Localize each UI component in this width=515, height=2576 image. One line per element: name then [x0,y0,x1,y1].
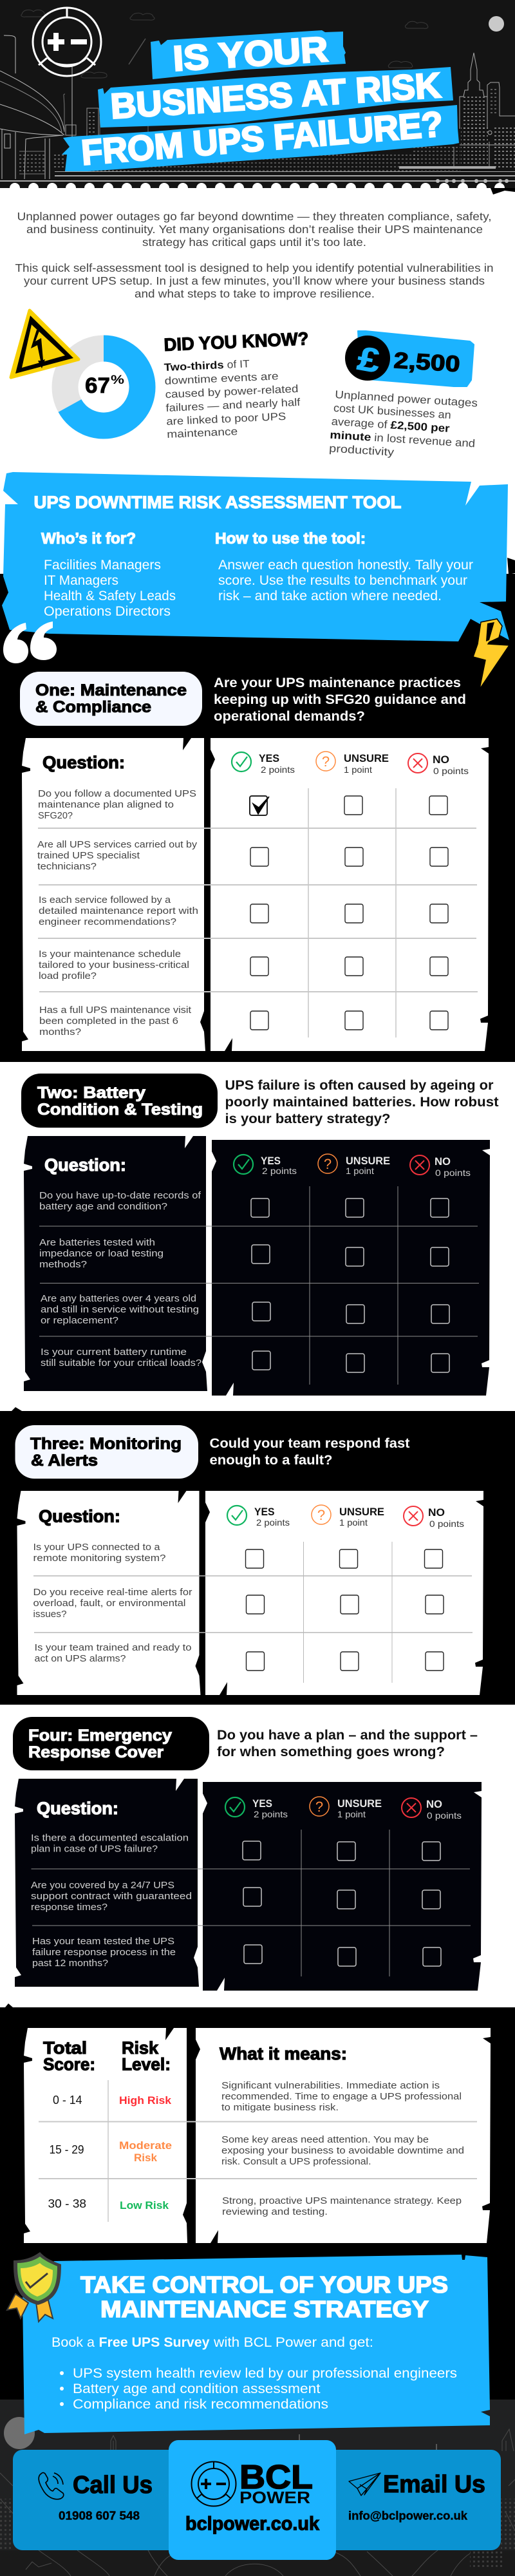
stat text: average of [331,415,388,431]
section four: question panel [15,1779,199,1987]
panel: email us: info@bclpower.co.uk [348,2509,468,2522]
icon: unsure: ? [315,1799,323,1815]
section three: answer panel: NO [428,1506,445,1519]
panel: score and risk level: High Risk [119,2094,172,2107]
section four: checkboxes [243,1841,441,1966]
section one: lead question: Are your UPS maintenance practices [214,675,461,690]
panel: score and risk level: Moderate [119,2139,172,2152]
title: three rotated blue banners: BUSINESS AT RISK [109,65,442,126]
intro text: your current UPS setup. In just a few minutes, you’ll know where your business stands [24,274,485,287]
section two: question panel: Are any batteries over 4 years old [41,1294,196,1304]
panel: call to action: with BCL Power and get: [213,2334,373,2350]
icon: unsure [316,752,335,771]
section four: answer panel: NO [426,1798,442,1810]
section three: answer panel: YES [254,1506,274,1518]
donut chart: 67%: % [111,374,124,387]
did you know text: failures — and nearly half [165,397,301,414]
section one: question panel: SFG20? [38,811,73,821]
panel: call to action: Book a [52,2334,95,2350]
section two: lead question [225,1077,498,1126]
section two: grid lines [39,1186,479,1385]
panel: risk assessment tool: Answer each question honestly. Tally your [218,558,473,573]
stat text [329,388,478,463]
section four: answer panel: 1 point [337,1809,366,1819]
section three: question panel: act on UPS alarms? [35,1654,126,1664]
section one: question panel: Are all UPS services carried out by [37,840,198,850]
icon: yes [232,752,251,772]
section four: question panel: plan in case of UPS failure? [31,1844,158,1855]
section three: lead question [210,1435,409,1468]
section one: heading pill [20,672,202,726]
section two: question panel: battery age and condition? [39,1202,167,1212]
section three: heading pill: & Alerts [31,1452,98,1470]
section one: lead question [214,675,466,724]
stat badge: £2,500: 2,500 [393,348,461,377]
section one: answer panel: 2 points [261,764,295,775]
icon: no [404,1506,423,1526]
panel: risk assessment tool: IT Managers [44,573,118,588]
section two: lead question: UPS failure is often caused by ageing or [225,1077,494,1093]
title: three rotated blue banners: IS YOUR [172,29,329,79]
road bands [0,166,515,182]
section one: grid lines [38,788,478,1037]
section one: question panel: Question: [42,753,125,772]
section four: heading pill: Four: Emergency [28,1727,172,1745]
panel: risk assessment tool: risk – and take action where needed. [218,589,442,603]
section two: lead question: poorly maintained batteries. How robust [225,1094,498,1110]
section three: question panel: Question: [39,1507,120,1526]
stat badge: £2,500 [345,331,474,386]
panel: score and risk level: 0 - 14 [53,2094,82,2107]
section three: answer panel: 0 points [429,1519,464,1529]
icon: lightning bolt [473,619,509,689]
section one: question panel: Is your maintenance schedule [39,949,181,960]
score table grid lines [39,2080,477,2222]
section one: answer panel: YES [259,752,279,764]
panel: what it means: What it means: [220,2044,347,2063]
panel: what it means: to mitigate business risk. [221,2103,339,2113]
did you know text: are linked to poor UPS [166,411,286,428]
intro text: and business continuity. Yet many organisations don’t realise their UPS maintenance [26,223,483,236]
icon: unsure [318,1154,337,1173]
section one: checkboxes [250,796,448,1030]
panel: call us: Call Us [73,2472,153,2499]
panel: score and risk level: Level: [122,2054,171,2074]
panel: risk assessment tool: UPS DOWNTIME RISK ASSESSMENT TOOL [33,493,402,512]
icon: yes [225,1797,245,1817]
stat text: cost UK businesses an [333,402,451,421]
intro text: Unplanned power outages go far beyond downtime — they threaten compliance, safety, [17,210,491,223]
panel: call to action [23,2255,490,2434]
icon: unsure: ? [324,1156,332,1172]
section two: question panel: and still in service without testing [41,1305,199,1315]
section three: question panel: issues? [33,1609,67,1620]
panel: BCL power logo block: BCL [239,2459,313,2496]
section four: question panel: support contract with guaranteed [31,1891,192,1902]
icon: shield badge [7,2252,61,2322]
section three: answer panel: 2 points [256,1517,290,1528]
section four: question panel: failure response process in the [32,1947,176,1958]
intro text [15,210,493,300]
panel: BCL power logo block: bclpower.co.uk [185,2513,319,2535]
panel: call to action: Battery age and condition assessment [73,2381,321,2396]
section four: answer panel: 0 points [427,1810,462,1821]
header: night city scene [0,0,515,193]
bridge and street furniture [0,35,148,179]
logo: BCL roundel [33,8,101,76]
footer background: dark city [0,2400,515,2576]
panel: risk assessment tool: Facilities Managers [44,558,161,573]
panel: call us: 01908 607 548 [59,2509,140,2522]
section two: answer panel [212,1140,490,1396]
section one: question panel: load profile? [39,971,97,981]
panel: risk assessment tool: score. Use the results to benchmark your [218,573,467,588]
section four: answer panel: 2 points [254,1809,288,1819]
section three: heading pill: Three: Monitoring [30,1435,182,1453]
moon [489,16,504,32]
section four: question panel: Are you covered by a 24/7 UPS [31,1880,174,1891]
panel: call us [39,2472,153,2522]
intro text: strategy has critical gaps until it’s too late. [142,236,366,249]
stat text: £2,500 per [390,419,450,435]
icon: quotation mark [3,621,57,663]
section one: answer panel: UNSURE [344,752,389,764]
shooting star [129,39,145,64]
panel: score and risk level: 30 - 38 [48,2197,86,2210]
icon: unsure [310,1797,329,1816]
icon: high voltage warning triangle [11,310,79,377]
section four: question panel: Is there a documented escalation [31,1833,189,1843]
tick mark [253,797,269,814]
did you know heading: DID YOU KNOW? [164,328,309,355]
panel: email us: Email Us [383,2471,485,2498]
section four: answer panel: UNSURE [337,1797,382,1810]
section one: heading pill: & Compliance [35,698,151,716]
section one: answer panel [211,738,489,1051]
section two: answer panel: UNSURE [346,1155,390,1167]
section one: question panel: maintenance plan aligned to [38,800,174,810]
section one: question panel: months? [39,1027,81,1037]
logo: BCL roundel [192,2461,236,2506]
section two: question panel: Are batteries tested with [39,1238,155,1248]
section one: question panel [22,738,205,1051]
section three: lead question: enough to a fault? [210,1452,332,1468]
section one: question panel: engineer recommendations? [39,917,176,927]
section two: heading pill: Condition & Testing [37,1101,203,1119]
panel: contact bar [13,2450,501,2550]
section three: answer panel: UNSURE [339,1506,384,1518]
right towers [454,53,515,169]
panel: what it means: exposing your business to avoidable downtime and [221,2146,464,2156]
section one: answer panel: 0 points [433,766,469,776]
panel: call to action: MAINTENANCE STRATEGY [100,2296,429,2322]
did you know text: caused by power-related [165,383,299,401]
icon: unsure: ? [322,753,330,770]
section four: answer panel: YES [252,1797,272,1810]
title: three rotated blue banners: FROM UPS FAILURE? [80,104,444,173]
panel: score and risk level: Score: [43,2054,95,2074]
panel: call to action: Compliance and risk recommendations [73,2396,328,2412]
section three: heading pill [15,1425,198,1479]
section two: question panel [24,1136,207,1391]
section four: grid lines [31,1830,471,1976]
section three: question panel: remote monitoring system? [33,1553,166,1564]
section two: answer panel: NO [435,1155,451,1168]
panel: risk assessment tool: Health & Safety Leads [44,589,176,603]
section four: answer panel [203,1782,482,1991]
stat text: Unplanned power outages [335,388,478,410]
icon: no [402,1798,421,1817]
panel: score and risk level: Total [43,2038,87,2058]
panel: risk assessment tool: How to use the tool: [215,530,366,547]
scalloped bottom edge [10,183,505,193]
panel: what it means: Significant vulnerabilities. Immediate action is [221,2081,440,2091]
panel: BCL power logo block: POWER [239,2488,310,2507]
stat text: minute [330,429,371,444]
section two: question panel: impedance or load testing [39,1249,164,1259]
section two: question panel: still suitable for your critical loads? [41,1358,201,1368]
section one: lead question: keeping up with SFG20 guidance and [214,692,466,707]
panel: what it means [196,2028,491,2243]
section one: answer panel: 1 point [344,764,372,775]
section three: checkboxes [246,1549,444,1671]
section two: answer panel: 0 points [435,1168,471,1178]
panel: score and risk level: Risk [122,2038,159,2058]
section two: question panel: methods? [39,1260,87,1270]
panel: what it means: reviewing and testing. [222,2207,328,2217]
section four: heading pill [13,1717,209,1770]
section one: question panel: Do you follow a documented UPS [38,789,196,799]
section two: question panel: or replacement? [41,1316,118,1326]
panel: email us [348,2471,485,2522]
section three: lead question: Could your team respond fast [210,1435,409,1451]
section four: lead question: for when something goes wrong? [217,1744,445,1759]
panel: BCL power logo block [169,2440,336,2560]
section two: checkboxes [251,1198,449,1372]
section one: question panel: Has a full UPS maintenance visit [39,1005,191,1016]
section four: question panel: Question: [37,1799,118,1818]
section two: question panel: Question: [44,1155,126,1175]
clouds and stars [21,10,428,78]
section two: lead question: is your battery strategy? [225,1111,390,1126]
section one: lead question: operational demands? [214,708,365,724]
panel: call to action: TAKE CONTROL OF YOUR UPS [80,2271,448,2298]
stat badge: £2,500: £ [355,340,383,381]
section three: question panel: Is your team trained and ready to [35,1643,192,1653]
stat text: in lost revenue and [374,431,476,450]
section three: answer panel: 1 point [339,1517,368,1528]
icon: no [408,753,427,773]
panel: what it means: recommended. Time to engage a UPS professional [221,2092,462,2102]
section two: heading pill: Two: Battery [37,1084,145,1102]
icon: paper plane [349,2473,380,2496]
section four: question panel: Has your team tested the UPS [32,1937,174,1947]
section two: heading pill [21,1074,218,1128]
section one: question panel: Is each service followed by a [39,895,171,905]
section two: answer panel: YES [261,1155,281,1167]
did you know text: downtime events are [164,370,279,387]
section four: question panel: past 12 months? [32,1958,108,1969]
section one: heading pill: One: Maintenance [35,681,187,699]
section one: question panel: tailored to your business-critical [39,960,189,971]
panel: score and risk level [24,2028,187,2243]
icon: unsure [312,1505,331,1524]
section one: question panel: technicians? [37,862,97,872]
panel: call to action: Free UPS Survey [99,2334,210,2350]
section two: answer panel: 2 points [262,1166,297,1176]
did you know text: of IT [227,358,250,371]
intro text: This quick self-assessment tool is designed to help you identify potential vulnerabilities in [15,261,493,274]
section four: question panel: response times? [31,1902,108,1913]
panel: call to action: UPS system health review led by our professional engineers [73,2365,457,2381]
section two: question panel: Is your current battery runtime [41,1347,187,1358]
section three: question panel [17,1491,201,1695]
did you know text [164,356,302,440]
panel: score and risk level: 15 - 29 [49,2143,84,2156]
section one: question panel: been completed in the past 6 [39,1016,178,1027]
section one: question panel: detailed maintenance report with [39,906,198,916]
donut chart: 67%: 67 [85,374,110,398]
intro text: and what steps to take to improve resilience. [135,287,375,300]
panel: score and risk level: Risk [134,2152,158,2164]
section one: answer panel: NO [433,753,449,766]
section three: grid lines [33,1542,473,1683]
icon: unsure: ? [317,1507,325,1523]
section two: question panel: Do you have up-to-date records of [39,1191,201,1201]
panel: what it means: risk. Consult a UPS professional. [221,2157,371,2167]
panel: what it means: Some key areas need attention. You may be [221,2135,429,2145]
title: three rotated blue banners [62,29,459,173]
did you know text: maintenance [167,426,238,440]
section four: heading pill: Response Cover [28,1743,164,1761]
panel: risk assessment tool [2,472,515,641]
icon: no [410,1155,429,1175]
section three: question panel: Is your UPS connected to a [33,1542,161,1553]
section three: question panel: Do you receive real-time alerts for [33,1587,192,1598]
panel: risk assessment tool: Operations Directors [44,604,171,619]
panel: risk assessment tool: Who’s it for? [41,530,136,547]
section two: answer panel: 1 point [346,1166,374,1176]
icon: phone [39,2473,64,2499]
icon: yes [227,1506,247,1525]
panel: score and risk level: Low Risk [120,2199,169,2211]
section four: lead question: Do you have a plan – and the support – [217,1727,478,1743]
stat text: productivity [329,442,395,459]
section three: question panel: overload, fault, or environmental [33,1598,185,1609]
section three: answer panel [205,1491,483,1695]
panel: what it means: Strong, proactive UPS maintenance strategy. Keep [222,2196,462,2206]
did you know text: Two-thirds [164,359,224,374]
icon: yes [234,1155,253,1174]
section one: question panel: trained UPS specialist [37,851,140,861]
section four: lead question [217,1727,478,1759]
donut chart: 67% [65,348,142,426]
